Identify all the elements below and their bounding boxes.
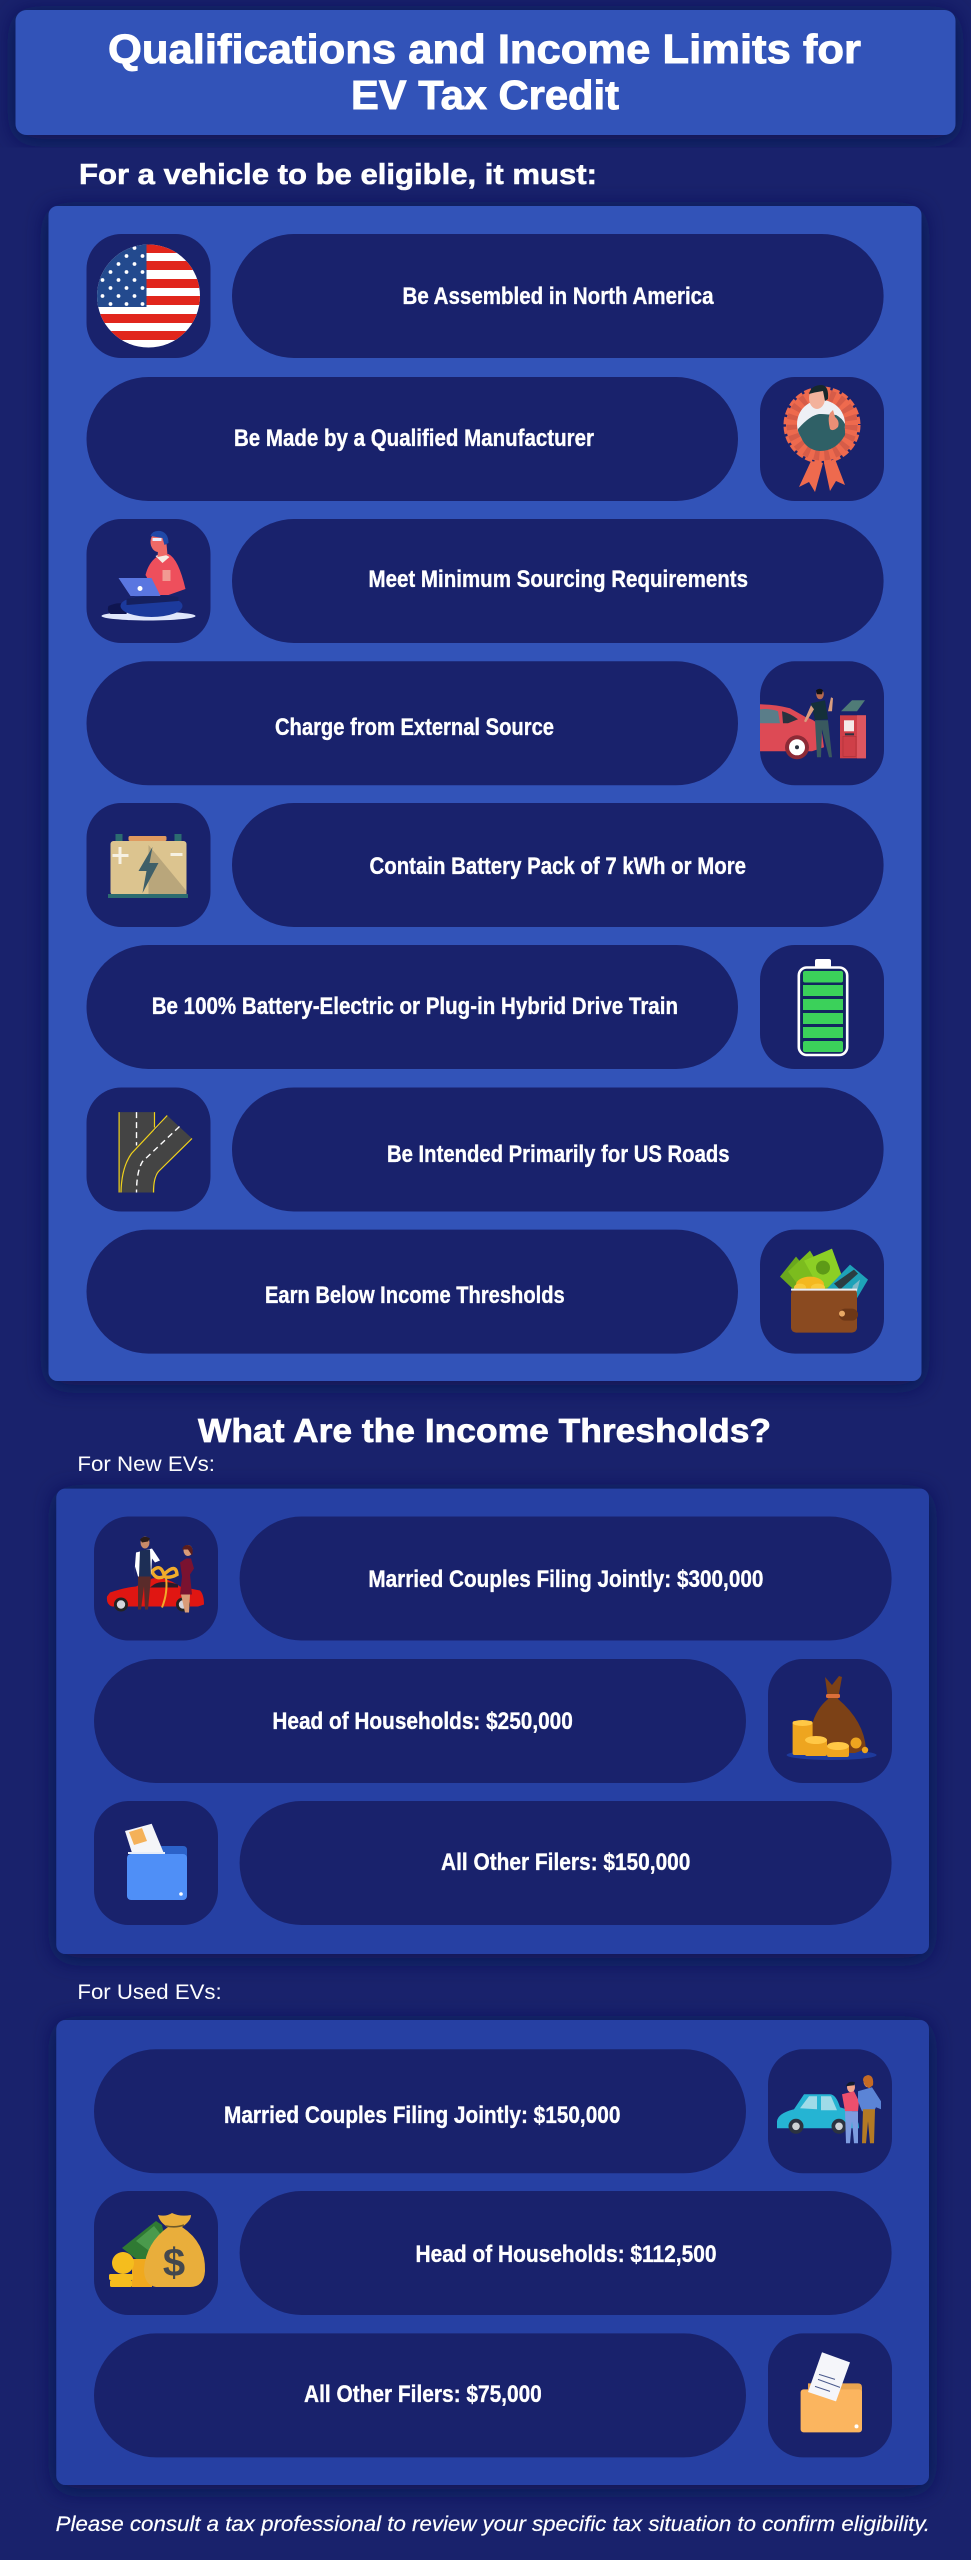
label: Be Made by a Qualified Manufacturer — [234, 425, 594, 452]
label: All Other Filers: $75,000 — [304, 2381, 542, 2408]
label: Meet Minimum Sourcing Requirements — [368, 566, 748, 593]
row: US roads — [86, 1088, 884, 1212]
icon: person with laptop — [86, 519, 210, 643]
icon: wallet with money — [760, 1230, 884, 1354]
icon: car battery — [86, 803, 210, 927]
label: Contain Battery Pack of 7 kWh or More — [370, 853, 746, 880]
panel: used EV limits — [56, 2020, 929, 2485]
icon: car at charging station — [760, 661, 884, 785]
label: Be 100% Battery-Electric or Plug-in Hybrid Drive Train — [152, 993, 678, 1020]
label: Married Couples Filing Jointly: $300,000 — [368, 1566, 763, 1593]
label: Be Assembled in North America — [402, 283, 714, 310]
row: external charging — [86, 661, 884, 785]
row: qualified manufacturer — [86, 377, 884, 501]
row: drive train — [86, 945, 884, 1069]
panel: new EV limits — [56, 1489, 929, 1954]
row: new head of household — [94, 1659, 892, 1783]
icon: full battery — [760, 945, 884, 1069]
heading: income thresholds: What Are the Income Thresholds? — [198, 1412, 771, 1449]
row: used married — [94, 2049, 892, 2173]
icon: money sack and coins — [768, 1659, 892, 1783]
icon: couple with blue car — [768, 2049, 892, 2173]
title: Qualifications and Income Limits for — [108, 26, 861, 72]
icon: dollar money bag — [94, 2191, 218, 2315]
row: new all others — [94, 1801, 892, 1925]
icon: dollar money bag: $ — [163, 2241, 185, 2285]
footer disclaimer: Please consult a tax professional to review your specific tax situation to confirm eligibility. — [56, 2513, 930, 2536]
title banner — [16, 10, 956, 135]
label: Married Couples Filing Jointly: $150,000 — [224, 2102, 620, 2129]
label: Head of Households: $250,000 — [272, 1708, 573, 1735]
label: Charge from External Source — [275, 714, 554, 741]
icon: orange folder with document — [768, 2333, 892, 2457]
row: new married — [94, 1516, 892, 1640]
icon: blue folder with document — [94, 1801, 218, 1925]
title: EV Tax Credit — [351, 72, 619, 118]
label: Head of Households: $112,500 — [416, 2241, 716, 2268]
icon: US flag — [86, 234, 210, 358]
subheading: used EVs: For Used EVs: — [77, 1980, 222, 2004]
icon: rosette with man — [760, 377, 884, 501]
label: All Other Filers: $150,000 — [441, 1849, 690, 1876]
title — [108, 26, 861, 118]
row: used all others — [94, 2333, 892, 2457]
panel: vehicle requirements — [48, 206, 922, 1381]
subheading: new EVs: For New EVs: — [77, 1452, 215, 1476]
row: income thresholds — [86, 1230, 884, 1354]
label: Be Intended Primarily for US Roads — [387, 1141, 730, 1168]
icon: couple with red gift car — [94, 1516, 218, 1640]
heading: eligibility: For a vehicle to be eligible, it must: — [79, 159, 597, 191]
icon: forking road — [86, 1088, 210, 1212]
row: sourcing requirements — [86, 519, 884, 643]
row: assembled in North America — [86, 234, 884, 358]
label: Earn Below Income Thresholds — [265, 1282, 565, 1309]
row: used head of household — [94, 2191, 892, 2315]
row: battery pack — [86, 803, 884, 927]
